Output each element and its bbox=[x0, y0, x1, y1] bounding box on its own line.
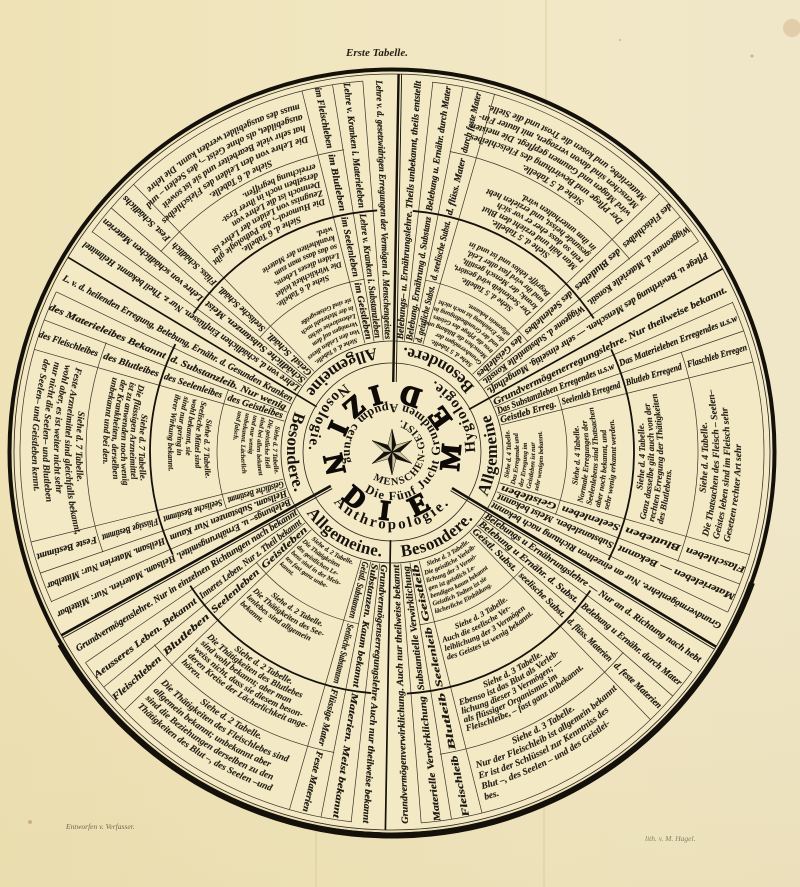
radial labels bbox=[396, 80, 710, 396]
radial labels: L. v. d. heilenden Erregung, Belebung, Ernähr. d. Gesunden Kranken bbox=[60, 273, 294, 404]
text block: Fleischleben: Siehe d. 2 Tabelle. bbox=[197, 697, 265, 744]
text block: Blutleben: weiss nicht, dass sie diesem beson- bbox=[192, 624, 308, 740]
text block: Seelenleben: bekannt. bbox=[238, 598, 267, 626]
text block: Seelenleib: Siehe d. 7 Tabelle. bbox=[202, 419, 214, 479]
text block: Seelenleib: Siehe d. 3 Tabelle. bbox=[452, 594, 510, 633]
text block: Seelenleib: Begriffe leblos und ist und in bbox=[469, 242, 550, 297]
radial labels: des Seelenleibes bbox=[522, 288, 574, 337]
radial labels: des Blutleibes bbox=[572, 246, 622, 292]
text block: Blutleib: Ebenso ist das Blut als Verleb- bbox=[451, 646, 567, 707]
text block: Blutleib bbox=[102, 378, 148, 486]
big shadow letters: DIE MEDIZIN: I bbox=[377, 495, 392, 527]
radial labels: Geistliche Bestimmt bbox=[226, 478, 285, 504]
text block: Seelenleib: Der Seelenleib wird gestört, bbox=[454, 264, 532, 316]
text block: Seelenleben bbox=[262, 227, 342, 306]
text block: Blutleben: sind wohl bekannt; aber man bbox=[198, 622, 296, 720]
text block: Geistleib: und der Grundbedingung in bbox=[434, 307, 498, 348]
text block: Fleischleib: nur nicht die Seelen– und Blutleben bbox=[16, 361, 89, 505]
text block: Fleischleben: Die Lehre von den Leiden des Fleischleibes bbox=[147, 133, 321, 227]
radial labels: Seelische Bestimmt bbox=[162, 497, 223, 524]
radial labels: Materieleben — Bekannt bbox=[616, 542, 738, 602]
radial labels: Inneres Leben. Nur z. Theil bekannt bbox=[197, 518, 304, 602]
text block: Geistleib: Das Erregende und bbox=[510, 433, 520, 485]
text block: Geistleib: gen ist geistlich Le- bbox=[424, 563, 480, 592]
radial labels: Belebung u Ernähr. d. Subst. bbox=[476, 519, 580, 605]
text block: Seelenleib: Siehe d. 5 Tabelle. bbox=[462, 278, 513, 312]
radial labels: Pflege u. Bewirthung des Menschen. — sehr einseitig. Mangelhaft. bbox=[485, 250, 710, 396]
text block: Fleischleib: Siehe d. 7 Tabelle. bbox=[72, 411, 86, 482]
text block: Blutleib: ist zu anwenden noch wenig bbox=[102, 381, 157, 489]
text block: Fleischleben: Siehe d. 6 Tabelle. bbox=[206, 156, 274, 201]
text block: Fleischleib: Siehe d. 4 Tabelle. bbox=[699, 422, 708, 493]
text block: Fleischleib: Mutterliebe, und kosen die Trost und die Stelle. bbox=[488, 105, 647, 202]
text block: Seelenleib: Seelische Mittel sind bbox=[182, 400, 220, 472]
radial labels: Flaschleb Erregen bbox=[685, 343, 748, 371]
text block: Fleischleib: bes. bbox=[483, 789, 500, 803]
text block: Fleischleben: Thätigkeiten des Blut –, des Seelen –und bbox=[135, 677, 277, 819]
text block: Geistleben: Von den Leiden dieses bbox=[302, 327, 364, 362]
text block: Blutleben: hören. bbox=[180, 656, 205, 681]
big shadow letters: DIE MEDIZIN: E bbox=[404, 487, 434, 523]
section names: Nosologie, Hygiologie, Anthropologie: Anthropologie. bbox=[331, 494, 453, 533]
text block: Geistleib: Geistleben ist nur bbox=[526, 442, 536, 488]
radial labels: Geistl. Schädl. bbox=[265, 330, 314, 377]
section names: Nosologie, Hygiologie, Anthropologie: Hygiologie. bbox=[423, 371, 489, 459]
text block: Seelenleben: Siehe d. 6 Tabelle. bbox=[274, 271, 332, 310]
radial labels: Flüssige Mater bbox=[316, 687, 339, 747]
text block: Fleischleib: wird Magen und Gaumen gepflegt. Die meisten bbox=[470, 124, 630, 216]
text block: Geistleib: Siehe d. 4 Tabelle. bbox=[504, 430, 512, 478]
radial labels: Lehre von d. schädlichen Einflüssen. Nur z. Theil bekannt. Heilmittel bbox=[81, 239, 302, 393]
text block: Blutleib: Man hält und erzieht den Blut bbox=[482, 206, 578, 270]
sector headings: Allgemeine and Besondere: Allgemeine bbox=[298, 337, 385, 405]
text block: Blutleben: Die Humoral–, das Pathologie gibt bbox=[202, 197, 335, 269]
radial labels: d. flüss. Mater bbox=[445, 157, 468, 216]
text block: Geistleben: Siehe d. 2 Tabelle. bbox=[309, 535, 356, 569]
text block: Blutleib bbox=[636, 394, 672, 524]
caption: lithographer: lith. v. M. Hagel. bbox=[645, 834, 696, 843]
radial labels: Flaschleben bbox=[685, 545, 748, 574]
text block: Fleischleib: Blut –, des Seelen – und des Geistlei- bbox=[472, 718, 620, 792]
radial labels: Seelenleb Erregend bbox=[561, 381, 622, 407]
sector headings: Allgemeine and Besondere: Allgemeine. bbox=[298, 500, 390, 569]
big shadow letters: DIE MEDIZIN: D bbox=[337, 480, 372, 517]
text block: Seelenleib: wohl bekannt, sie bbox=[176, 398, 207, 458]
main spokes dividing six sectors bbox=[61, 74, 723, 830]
radial labels: Geistleb Erreg. bbox=[499, 400, 558, 426]
radial labels: Belebungs– u. Ernährungsmittel. Heilsam. Materien. Nur: Mittelbar bbox=[55, 496, 293, 619]
text block: Geistleib: und falsch. bbox=[229, 410, 246, 442]
text block: Fleischleib: Nur der Fleischleib ist allgemein bekannt bbox=[464, 682, 630, 771]
text block: Blutleben: Dennoch ist die Lehre von bbox=[226, 179, 327, 230]
radial labels: Feste Materien bbox=[300, 749, 324, 813]
text block: Seelenleben: Die Wirklichkeit leidet bbox=[269, 259, 347, 301]
big shadow letters: DIE MEDIZIN: Z bbox=[337, 389, 371, 424]
text block: Seelenleben: so das dass man zum bbox=[270, 242, 342, 279]
text block: Geistleben: sie sind Geistesgröße bbox=[297, 296, 356, 327]
text block: Geistleib: Grundvermögen der bbox=[435, 334, 482, 364]
text block: Seelenleib: Siehe d. 4 Tabelle. bbox=[572, 426, 580, 485]
sector headings: Allgemeine and Besondere: Besondere. bbox=[283, 410, 309, 494]
radial labels bbox=[74, 508, 388, 824]
radial labels: Geistleben bbox=[500, 483, 558, 511]
section names: Nosologie, Hygiologie, Anthropologie: Nosologie. bbox=[296, 376, 355, 458]
text block: Seelenleib: Normale Erregungen der bbox=[577, 420, 591, 504]
radial labels: Blutleib bbox=[437, 691, 459, 753]
text block: Blutleib: des Blutlebens. bbox=[657, 470, 672, 524]
radial labels: Geistleben bbox=[260, 525, 310, 571]
text block: Seelenleben: lenlebes sind allgemein bbox=[245, 583, 315, 653]
text block: Fleischleib: Der Pflege und Bewirthung des Fleischleibes bbox=[470, 134, 624, 225]
icon: six-pointed compass star bbox=[372, 429, 412, 475]
radial labels: Grundvermögenslehre. Nur in einzelnen Richtungen nach bekannt bbox=[74, 508, 300, 654]
big shadow letters: DIE MEDIZIN: D bbox=[396, 378, 425, 413]
radial labels: Das Substanzleben Erregendes u.s.w bbox=[495, 362, 616, 417]
sector headings: Allgemeine and Besondere bbox=[287, 348, 499, 557]
radial labels: d. seelische Subst. bbox=[429, 220, 453, 281]
centre ring text: Die Fünf: Die Fünf Jucht Grundmen Apudm cerung bbox=[321, 381, 463, 523]
radial labels: Flüssige Bestimmt bbox=[100, 515, 160, 542]
radial labels: im Blutleben bbox=[326, 153, 347, 212]
radial labels: Grundvermögenverwirklichung. Auch nur theilweise bekannt bbox=[392, 564, 411, 824]
text block: Blutleib: Ganz dasselbe gilt auch von der bbox=[640, 404, 656, 520]
radial labels: Blutleben bbox=[624, 524, 684, 553]
radial labels: Materien. Meist bekannt bbox=[330, 691, 359, 819]
radial labels: des Geistleibes bbox=[474, 333, 524, 379]
text block: Geistleib: Die geistliche Verleib- bbox=[419, 542, 481, 577]
radial labels: Seelische Schädl. bbox=[217, 284, 268, 333]
radial labels: des Materieleibes Bekannt bbox=[47, 303, 168, 362]
text block: Geistleben: in der Mehrzahl noch bbox=[296, 304, 357, 337]
text block: Blutleib: Siehe d. 4 Tabelle. bbox=[636, 424, 646, 490]
radial labels: Aeusseres Leben. Bekannt bbox=[92, 597, 199, 681]
text block: Seelenleib: sind nur gering in bbox=[167, 395, 199, 458]
radial labels: Fleischleib bbox=[450, 754, 472, 819]
text block: Fleischleben: ausgebildet, als ohne Geist –, des Seelen – und bbox=[131, 112, 315, 211]
text block: Blutleib: Siehe d. 5 Tabelle. bbox=[492, 220, 550, 258]
text block: Fleischleib bbox=[699, 390, 742, 542]
text block: Geistleib: und nur wenig bbox=[242, 414, 264, 457]
text block: Fleischleben: Die Thätigkeiten des Fleischlebes sind bbox=[158, 654, 293, 789]
radial labels: Belebung. Ernährung d. Substanz bbox=[405, 216, 434, 342]
text block: Geistleib: Menschen die Bildung und bbox=[424, 321, 488, 360]
text block: Geistleib: Siehe d. 5 Tabelle. bbox=[432, 340, 473, 367]
radial labels: d. Substanzleib. Nur wenig bbox=[169, 355, 288, 413]
text block: Seelenleben: Leiden dieses Lebens, bbox=[269, 251, 345, 290]
text block: Blutleib: in ihm unterhalten wird. bbox=[522, 194, 596, 251]
radial labels: d. feste Materien bbox=[611, 661, 663, 711]
radial labels: seelische Subst. bbox=[516, 570, 567, 620]
text block: Seelenleib: Seelenlebens sind Thatsachen bbox=[586, 407, 598, 506]
text block: Geistleib: lichung der 3 Vermö- bbox=[423, 552, 482, 584]
big shadow letters: DIE MEDIZIN: I bbox=[366, 378, 385, 411]
heading rings bbox=[281, 341, 503, 563]
radial labels: Geistl. Substanzen bbox=[346, 560, 370, 619]
radial labels: durch feste Mater bbox=[460, 91, 484, 154]
text block: Blutleben: Siehe d. 6 Tabelle. bbox=[239, 213, 304, 256]
radial labels: Substantielle Verwirklichung bbox=[402, 565, 427, 691]
text block: Blutleben bbox=[212, 164, 325, 265]
text block: Seelenleib: sehr wenig erkannt werden. bbox=[604, 420, 616, 510]
text block: Geistleib: der Erregung im bbox=[518, 442, 528, 487]
text block: Seelenleben: krankheiten der Materie bbox=[256, 234, 340, 277]
text block: Fleischleib bbox=[32, 359, 85, 534]
text block: Blutleben: Zeugniss von Leiden der Lehre ist bbox=[202, 188, 332, 257]
radial labels: Grundvermögenserregungslehre Auch nur theilweise bekannt bbox=[360, 564, 388, 824]
radial labels: Das Materieleben Erregendes u.s.w bbox=[617, 314, 739, 369]
radial labels: Blutleb Erregend bbox=[624, 362, 683, 389]
text block: Geistleib: der Erziehung ist noch nicht bbox=[438, 300, 504, 342]
radial labels: Fest. Schädlichs bbox=[121, 193, 173, 244]
radial labels: Seelenleben bbox=[210, 568, 262, 616]
big shadow letters: DIE MEDIZIN: M bbox=[435, 443, 468, 472]
radial labels: Lehre von schädlichen Materien bbox=[101, 216, 206, 303]
text block: Blutleib: Fleischleibe, – fast ganz unbekannt. bbox=[456, 661, 593, 733]
text block: Seelenleib bbox=[572, 407, 616, 510]
text block: Seelenleib bbox=[166, 394, 212, 478]
text block: Blutleben: derselben noch in ihrer Erst- bbox=[214, 171, 324, 227]
text block: Fleischleben: sind die Beziehungen derselben zu den bbox=[142, 671, 278, 806]
text block: Geistleib: treu die Pflege des Geistes bbox=[432, 315, 493, 353]
text block: Geistleib: sehr wenigen bekannt. bbox=[534, 432, 544, 492]
radial labels: Flüss. Schädlich bbox=[170, 240, 220, 288]
caption: author: Entworfen v. Verfasser. bbox=[65, 822, 135, 831]
text block: Seelenleben: Die Thätigkeiten des See- bbox=[250, 573, 329, 651]
radial labels bbox=[490, 285, 748, 630]
text block: Fleischleib: Die Thatsachen des Fleisch – Seelen– bbox=[702, 390, 720, 537]
radial labels: des Fleischleibes bbox=[37, 330, 100, 359]
text block: Geistleben: Vermögen auf dem bbox=[308, 320, 361, 348]
radial labels: Schädliche Substanzen. Meist bbox=[203, 298, 308, 384]
text block: Blutleib: Siehe d. 7 Tabelle. bbox=[136, 414, 150, 482]
text block: Seelenleib: krank; der Mensch gestillt, bbox=[464, 258, 538, 310]
radial labels bbox=[35, 273, 294, 619]
sector headings: Allgemeine and Besondere: Besondere. bbox=[394, 505, 480, 568]
text block: Seelenleib bbox=[454, 242, 550, 316]
text block: Fleischleib: Gesetzen rechter Art sehr bbox=[724, 444, 742, 542]
text block: Blutleben: Die Thätigkeiten des Blutlebes bbox=[204, 614, 308, 717]
radial labels: Belebung u. Ernähr. durch Mater bbox=[425, 85, 454, 213]
radial labels: Grundvermögenerregungslehre. Nur theilweise bekannt. bbox=[492, 285, 729, 408]
text block: Geistleib: allgemein bekannt. bbox=[468, 304, 510, 336]
text block: Seelenleben: wird. bbox=[315, 225, 334, 239]
radial labels: Heilsam. Substanzen Nur Kaum bbox=[168, 487, 289, 542]
text block: Geistleib: Siehe d. 7 Tabelle. bbox=[271, 425, 281, 475]
text block: Geistleib bbox=[424, 541, 492, 614]
radial labels: Belebungs u Ernährungslehre — Nur an d. Richtung nach hebt bbox=[481, 511, 703, 665]
radial labels: Wiggeone d. Substantielle Konstit. bbox=[480, 303, 586, 386]
radial labels: d. geistliche Subst. bbox=[414, 285, 438, 344]
text block: Seelenleib: und ihr wird fast aller Leid, bbox=[468, 250, 544, 302]
text block: Geistleben: ten fast ganz unbe- bbox=[284, 549, 331, 596]
text block: Fleischleben: muss des ausgebildet werden kann. Die lehre bbox=[133, 101, 312, 196]
text block: Geistleben: des geistlichen Le- bbox=[295, 538, 341, 584]
text block: Geistleben: bens sind in der Meis- bbox=[289, 541, 344, 596]
text block: Geistleben: kannt. bbox=[278, 560, 296, 578]
section names: Nosologie, Hygiologie, Anthropologie bbox=[308, 381, 478, 532]
big shadow letters: DIE MEDIZIN bbox=[317, 378, 468, 527]
text block: Geistleib: unbekannt. Lächerlich bbox=[228, 412, 263, 476]
radial labels: Belebungs– u. Ernährungslehre. Theils unbekannt, theils entstellt bbox=[396, 80, 424, 341]
text block: Fleischleben: hat sehr viele Bearbeiter und sie ist soweit bbox=[149, 123, 316, 211]
text block: Blutleib: gesunde heisst, und erzielen hebt bbox=[486, 188, 592, 256]
radial labels: des Geistleibes bbox=[226, 393, 284, 421]
text block: Geistleib bbox=[424, 300, 510, 367]
radial labels: Seelische Substanzen bbox=[331, 623, 355, 684]
text block: Geistleben: Lebenskreise nichts bbox=[303, 312, 360, 342]
big shadow letters: DIE MEDIZIN: N bbox=[317, 451, 351, 477]
text block: Geistleib: bendigen kaum bekannt bbox=[426, 564, 493, 600]
text block: Fleischleben: allgemein bekannt; unbekannt aber bbox=[151, 666, 275, 791]
big shadow letters: DIE MEDIZIN: E bbox=[422, 400, 458, 434]
radial labels: Substanzleben. Meist bekannt bbox=[496, 491, 615, 549]
radial labels: Belebung u Ernähr. durch Mater bbox=[578, 601, 683, 688]
big shadow letters: DIE MEDIZIN: I bbox=[321, 417, 354, 439]
text block: Geistleib: lächerliche Einbildung. bbox=[431, 581, 497, 615]
radial labels: Feste Bestimmt bbox=[35, 533, 99, 561]
radial labels: Blutleben bbox=[161, 612, 212, 659]
text block: Blutleben: erreichung begriffen. bbox=[238, 162, 320, 202]
radial labels: Lehre v. Kranken i. Materieleben bbox=[341, 81, 366, 209]
text block: Geistleib: sind bei allen bekannt bbox=[245, 416, 279, 478]
sector headings: Allgemeine and Besondere: Besondere. bbox=[395, 336, 482, 400]
text block: Fleischleib: Er ist der Schlüssel zur Kenntniss des bbox=[469, 704, 620, 782]
text block: Geistleib: Die geistliche Heil bbox=[255, 418, 283, 470]
radial labels: Substanzen. Kaum bekannt bbox=[350, 563, 379, 688]
radial labels: Seelenleben bbox=[560, 503, 622, 532]
title: Erste Tabelle. bbox=[345, 47, 408, 59]
text block: Fleischleib: Menschen sind davon verzogen, mit lauter Fin- bbox=[479, 115, 639, 210]
text block: Seelenleib: Auch die seelische Ver- bbox=[436, 602, 517, 645]
radial labels: Grundvermögenlehre. Nur an einzelnen Richtung nach bekannt bbox=[490, 500, 723, 630]
text block: Geistleib bbox=[233, 411, 280, 476]
radial labels: Fleischleben bbox=[110, 654, 164, 704]
text block: Geistleben bbox=[280, 537, 352, 587]
text block: Fleischleib: der Seelen– und Geistleben kennt. bbox=[7, 358, 74, 494]
radial labels: im Fleischleben bbox=[312, 87, 334, 149]
text block: Geistleben bbox=[300, 298, 360, 363]
radial labels: des Seelenleibes bbox=[162, 372, 224, 401]
text block: Blutleib: lichung dieser 3 Vermögen; — bbox=[454, 655, 570, 716]
sector headings: Allgemeine and Besondere: Allgemeine bbox=[473, 412, 503, 499]
radial labels: Heilsam. Materien Nur: Mittelbar bbox=[45, 535, 167, 590]
text block: Blutleib: rein so dass eher er vor sich bbox=[497, 202, 584, 264]
radial labels: des Fleischleibes bbox=[620, 201, 673, 250]
radial labels: Geistl. Subst. bbox=[470, 527, 519, 574]
text block: Blutleib: Die flüssigen Arzneimittel bbox=[112, 383, 164, 483]
radial labels bbox=[81, 79, 392, 393]
text block: Blutleib: als flüssiger Organismus im bbox=[457, 670, 564, 724]
text block: Blutleben: Siehe d. 2 Tabelle. bbox=[232, 643, 296, 688]
paper fold lines bbox=[316, 0, 546, 887]
radial labels: Geistleib bbox=[411, 563, 432, 622]
radial labels: Materielle Verwirklichung bbox=[418, 695, 443, 823]
text block: Geistleib: Siehe d. 3 Tabelle. bbox=[425, 537, 472, 570]
text block: Seelenleib: des Geistes ist wenig bekannt. bbox=[440, 608, 541, 662]
text block: Seelenleib: aber noch bekannt, und bbox=[595, 430, 608, 508]
radial labels bbox=[392, 511, 703, 824]
centre ring text: Menschen-Geist: MENSCHEN-GEIST. bbox=[360, 415, 442, 503]
radial labels: Lehre v. d. gesetzwidrigen Erregungen der Vermögen d. Menschengeistes bbox=[373, 79, 392, 340]
text block: Geistleib bbox=[504, 430, 544, 492]
text block: Geistleben: Siehe d. 6 Tabelle. bbox=[312, 334, 359, 367]
text block: Seelenleben: Siehe d. 2 Tabelle. bbox=[268, 590, 326, 630]
radial labels: im Seelenleben bbox=[338, 216, 360, 278]
radial labels: Wiggeonene d. Materielle Konstit. bbox=[585, 223, 691, 307]
text block: Fleischleib: wohl aber, es ist weiter nicht sehr bbox=[29, 364, 96, 497]
text block: Seelenleib: ihrer Wirkung bekannt. bbox=[154, 393, 195, 474]
text block: Fleischleib: Siehe d. 5 Tabelle. bbox=[524, 165, 584, 205]
radial labels: d. flüss. Materien bbox=[565, 617, 614, 664]
radial labels: Lehre v. Kranken i. Substanzleben bbox=[357, 212, 382, 339]
text block: Blutleib: unbekannt und bei den. bbox=[88, 377, 133, 467]
text block: Blutleib: rechten Erregung der Thätigkeiten bbox=[650, 394, 665, 522]
text block: Fleischleib: Geistes leben sind im Fleisch sehr bbox=[713, 408, 730, 539]
text block: Geistleib: Geistlich Todten ist sie bbox=[429, 575, 491, 608]
text block: Fleischleben bbox=[138, 679, 290, 791]
text block: Seelenleib: leiblichung der 3 Vermögen bbox=[438, 602, 533, 653]
radial labels: des Blutleibes bbox=[102, 352, 160, 380]
radial labels: Seelenleib bbox=[424, 626, 446, 688]
text block: Geistleben: Die Thätigkeiten bbox=[300, 532, 343, 575]
text block: Fleischleib: Siehe d. 3 Tabelle. bbox=[510, 703, 578, 748]
text block: Fleischleib: Feste Arzneimittel sind gleichfalls bekannt, bbox=[31, 366, 124, 538]
text block: Blutleib: der Krankheiten, derselben bbox=[94, 379, 146, 482]
text block: Blutleben: deren Kreise der Lächerlichkeit ange- bbox=[186, 628, 313, 754]
radial labels: im Geistleben bbox=[352, 282, 373, 341]
text block: Blutleib: Siehe d. 3 Tabelle. bbox=[480, 648, 545, 691]
